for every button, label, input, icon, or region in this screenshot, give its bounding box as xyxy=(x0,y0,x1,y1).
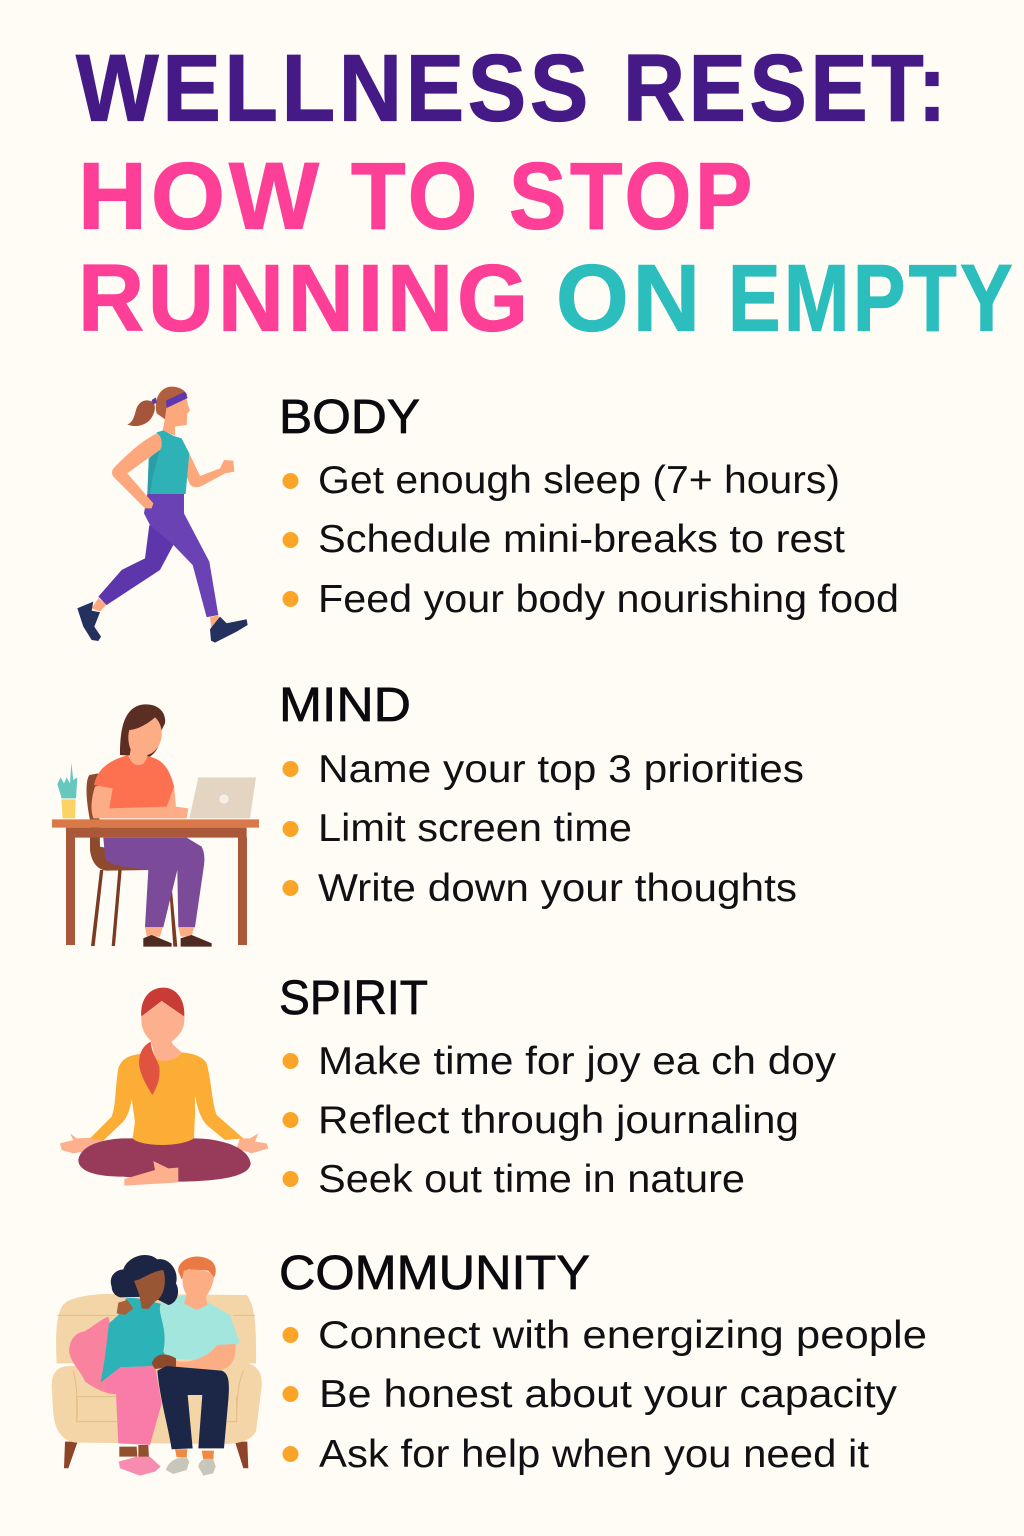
title: RESET: xyxy=(623,36,950,142)
bullet list: mind xyxy=(282,748,804,910)
icon: couple on a sofa xyxy=(52,1255,262,1476)
bullet list: mind: Name your top 3 priorities xyxy=(318,748,804,791)
title: HOW xyxy=(78,144,323,250)
bullet list: community xyxy=(282,1314,927,1476)
bullet list: spirit: Make time for joy ea ch doy xyxy=(318,1040,837,1083)
heading: spirit: SPIRIT xyxy=(279,972,428,1025)
icon: meditating woman xyxy=(60,988,268,1186)
bullet list: community: Be honest about your capacity xyxy=(319,1373,898,1416)
heading: body: BODY xyxy=(279,391,420,444)
icon: runner xyxy=(77,387,248,643)
bullet list: mind: Limit screen time xyxy=(318,807,632,850)
title xyxy=(76,36,1016,352)
title: STOP xyxy=(509,144,756,250)
bullet list: community: Connect with energizing people xyxy=(318,1314,927,1357)
bullet list: body: Schedule mini-breaks to rest xyxy=(318,518,845,561)
title: RUNNING xyxy=(78,246,532,352)
icon: person at desk with laptop xyxy=(52,704,259,947)
bullet list: body: Get enough sleep (7+ hours) xyxy=(318,459,840,502)
bullet list: body: Feed your body nourishing food xyxy=(318,578,899,621)
title: ON xyxy=(556,246,704,352)
bullet list: spirit xyxy=(282,1040,837,1201)
panel: spirit xyxy=(60,972,837,1201)
bullet list: spirit: Reflect through journaling xyxy=(318,1099,799,1142)
heading: mind: MIND xyxy=(279,679,411,732)
panel: body xyxy=(77,387,899,643)
title: WELLNESS xyxy=(76,36,592,142)
bullet list: community: Ask for help when you need it xyxy=(319,1433,869,1476)
bullet list: body xyxy=(282,459,899,621)
panel: community xyxy=(52,1247,927,1476)
bullet list: mind: Write down your thoughts xyxy=(318,867,797,910)
bullet list: spirit: Seek out time in nature xyxy=(318,1158,745,1201)
title: TO xyxy=(351,144,481,250)
heading: community: COMMUNITY xyxy=(279,1247,590,1300)
panel: mind xyxy=(52,679,804,947)
